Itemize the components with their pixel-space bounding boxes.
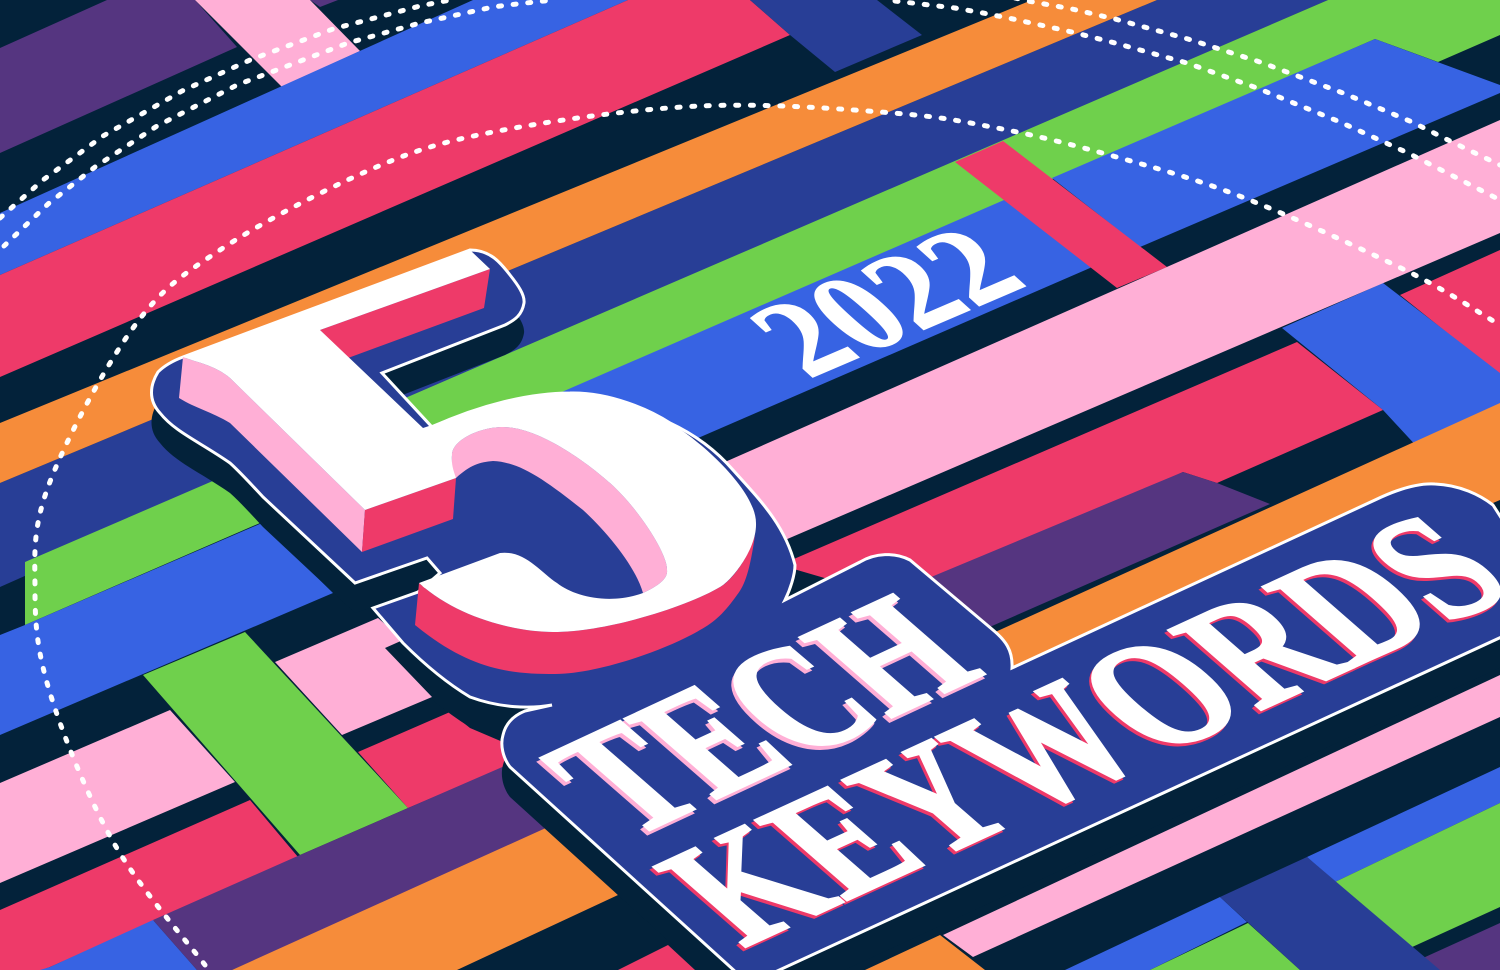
numeral 5 (179, 250, 756, 674)
numeral 5: white top surface (183, 250, 756, 632)
numeral 5: outer bowl red face (415, 535, 755, 674)
numeral 5: stem red face (362, 478, 456, 552)
numeral 5: top arm red face (320, 269, 490, 358)
numeral 5: left pink face (179, 357, 365, 552)
badge: outlined blue shape around numeral and title (152, 250, 1500, 970)
pink stripe segment beside the numeral tail (275, 618, 432, 735)
year label 2022: 2022 (719, 204, 1052, 399)
numeral 5: inner bowl pink face (452, 427, 667, 593)
badge shadow (152, 280, 1500, 970)
title word TECH: TECH (506, 565, 1018, 866)
title word TECH: TECH (504, 569, 1016, 870)
